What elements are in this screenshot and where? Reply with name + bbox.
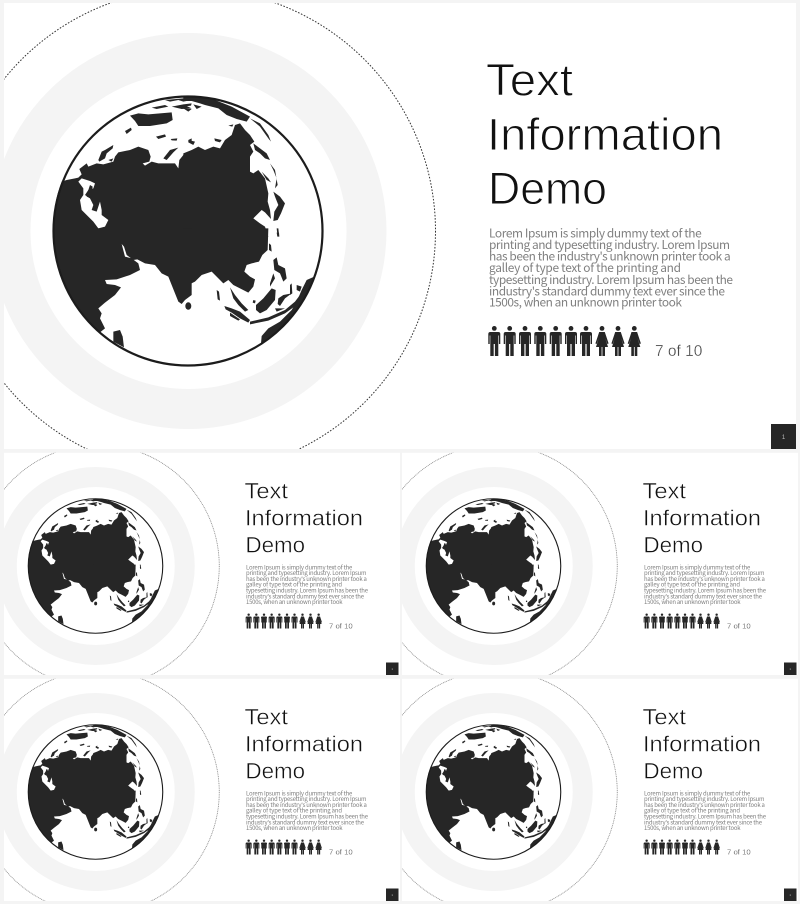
panel: thumbnail top left: galley of type text of the printing and (246, 580, 342, 588)
icon: globe (53, 96, 323, 366)
body text: industry's standard dummy text ever since the (489, 282, 725, 300)
panel: thumbnail bottom left: 7 of 10 (329, 848, 353, 856)
body text: has been the industry's unknown printer took a (489, 248, 731, 265)
panel: thumbnail bottom left: Lorem Ipsum is simply dummy text of the (246, 788, 353, 797)
panel: thumbnail bottom left: 1500s, when an unknown printer took (246, 823, 343, 832)
panel: thumbnail top right: has been the industry's unknown printer took a (644, 574, 765, 583)
panel: thumbnail bottom right: typesetting industry. Lorem Ipsum has been the (644, 812, 767, 820)
title: Information (487, 109, 723, 160)
panel: thumbnail top right: Demo (644, 532, 703, 558)
panel: thumbnail top left: has been the industry's unknown printer took a (246, 574, 367, 583)
panel: thumbnail bottom right: Demo (644, 758, 703, 784)
panel: thumbnail bottom left: industry's standard dummy text ever since the (246, 817, 365, 826)
panel: thumbnail bottom right: Information (643, 732, 761, 756)
panel: thumbnail bottom right: printing and typesetting industry. Lorem Ipsum (644, 794, 764, 803)
title (486, 55, 723, 214)
label: 7 of 10: 7 of 10 (655, 343, 703, 360)
panel: thumbnail bottom right: galley of type text of the printing and (644, 806, 740, 814)
panel: thumbnail top right: 7 of 10 (727, 622, 751, 630)
body text: galley of type text of the printing and (489, 259, 681, 276)
panel: thumbnail top left: industry's standard dummy text ever since the (246, 591, 365, 600)
panel: thumbnail top left: printing and typesetting industry. Lorem Ipsum (246, 568, 366, 577)
panel: thumbnail bottom left: has been the industry's unknown printer took a (246, 800, 367, 809)
panel: thumbnail bottom right: Text (642, 704, 687, 729)
body text: 1500s, when an unknown printer took (489, 294, 682, 311)
body text: typesetting industry. Lorem Ipsum has been the (489, 271, 733, 288)
panel: thumbnail bottom left: typesetting industry. Lorem Ipsum has been the (246, 812, 369, 820)
panel: thumbnail top right: Text (642, 478, 687, 503)
panel: thumbnail bottom right: 1500s, when an unknown printer took (644, 823, 741, 832)
panel: thumbnail bottom right: Lorem Ipsum is simply dummy text of the (644, 788, 751, 797)
panel: thumbnail bottom left: Text (244, 704, 289, 729)
panel: thumbnail top left: typesetting industry. Lorem Ipsum has been the (246, 586, 369, 594)
panel: thumbnail bottom left: Information (245, 732, 363, 756)
panel: thumbnail bottom left (0, 671, 400, 904)
body text (489, 224, 733, 311)
page number box: 1 (782, 435, 786, 441)
panel: thumbnail top right: Information (643, 506, 761, 530)
panel: main slide (0, 0, 796, 474)
panel: thumbnail bottom left: Demo (246, 758, 305, 784)
panel: thumbnail top right (402, 452, 798, 675)
panel: thumbnail top right: 1 (789, 667, 791, 671)
panel: thumbnail top right: galley of type text of the printing and (644, 580, 740, 588)
panel: thumbnail bottom left: printing and typesetting industry. Lorem Ipsum (246, 794, 366, 803)
panel: thumbnail bottom right: has been the industry's unknown printer took a (644, 800, 765, 809)
panel: thumbnail top right: industry's standard dummy text ever since the (644, 591, 763, 600)
title: Demo (488, 163, 607, 214)
panel: thumbnail top left: Lorem Ipsum is simply dummy text of the (246, 562, 353, 571)
pictogram: people row (488, 326, 641, 356)
panel: thumbnail bottom left: 1 (391, 893, 393, 897)
panel: thumbnail top right: typesetting industry. Lorem Ipsum has been the (644, 586, 767, 594)
panel: thumbnail top right: 1500s, when an unknown printer took (644, 597, 741, 606)
panel: thumbnail top left (0, 445, 400, 687)
rings: gray band and dotted orbit (0, 0, 436, 474)
panel: thumbnail bottom right: 1 (789, 893, 791, 897)
title: Text (486, 55, 574, 106)
panel: thumbnail bottom right: industry's standard dummy text ever since the (644, 817, 763, 826)
panel: thumbnail top left: 1 (391, 667, 393, 671)
body text: Lorem Ipsum is simply dummy text of the (489, 224, 702, 242)
panel: thumbnail top right: Lorem Ipsum is simply dummy text of the (644, 562, 751, 571)
panel: thumbnail bottom right (402, 678, 798, 901)
panel: thumbnail top right: printing and typesetting industry. Lorem Ipsum (644, 568, 764, 577)
panel: thumbnail top left: 7 of 10 (329, 622, 353, 630)
page number box (771, 424, 796, 449)
panel: thumbnail top left: Text (244, 478, 289, 503)
body text: printing and typesetting industry. Lorem Ipsum (489, 236, 730, 253)
panel: thumbnail top left: Demo (246, 532, 305, 558)
panel: thumbnail top left: 1500s, when an unknown printer took (246, 597, 343, 606)
panel: thumbnail bottom left: galley of type text of the printing and (246, 806, 342, 814)
panel: thumbnail bottom right: 7 of 10 (727, 848, 751, 856)
panel: thumbnail top left: Information (245, 506, 363, 530)
